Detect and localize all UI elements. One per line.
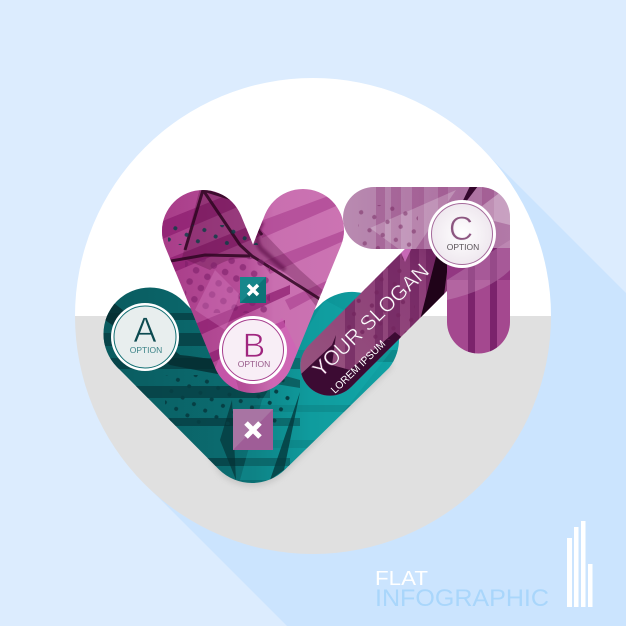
icon: bars [567, 521, 592, 607]
sub-slogan text: LOREM IPSUM [329, 338, 388, 396]
letter A: A [133, 311, 157, 350]
letter B: B [243, 327, 265, 365]
icon: large purple square with cross [233, 409, 273, 450]
circle C [428, 200, 496, 268]
panel: teal arrow A [100, 285, 410, 490]
panel: pink arrow B [160, 185, 350, 397]
main circle [75, 78, 551, 554]
slogan text: YOUR SLOGAN [308, 259, 434, 382]
heading: FLAT: FLAT [375, 567, 429, 590]
label A: OPTION [130, 345, 162, 355]
circle B [219, 316, 287, 384]
letter C: C [449, 210, 473, 248]
panel: slogan bar [300, 249, 447, 396]
icon: small teal square with cross [240, 277, 266, 303]
long shadow [145, 148, 626, 626]
heading: INFOGRAPHIC: INFOGRAPHIC [375, 585, 549, 612]
label C: OPTION [447, 242, 479, 252]
label B: OPTION [238, 359, 270, 369]
panel: purple arrow C [342, 185, 512, 354]
circle A [111, 303, 179, 371]
